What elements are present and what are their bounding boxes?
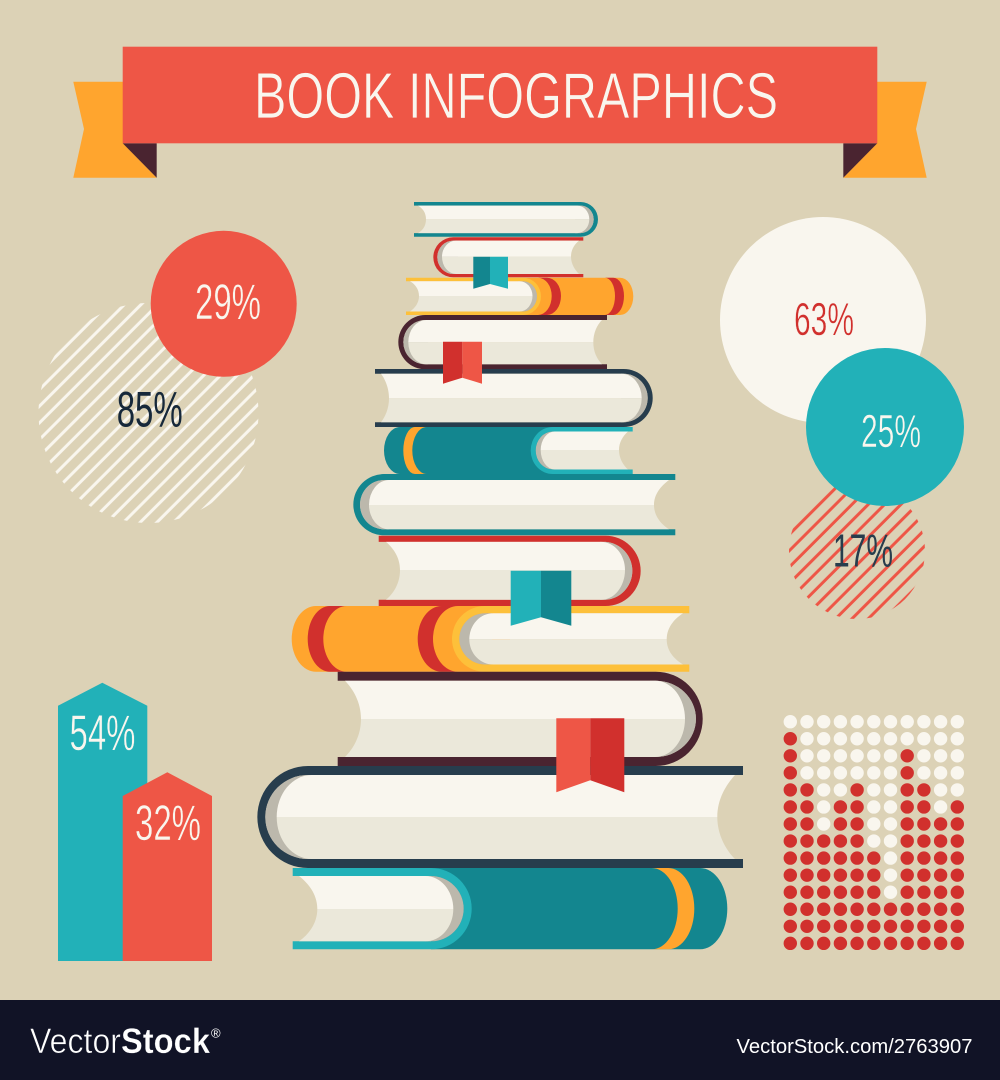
dot matrix chart <box>790 722 957 945</box>
banner right tail <box>843 82 927 178</box>
book 3: orange closed <box>406 278 633 315</box>
label 85%: 85% <box>117 382 183 438</box>
stack of books <box>257 202 743 949</box>
title text: BOOK INFOGRAPHICS <box>254 59 778 132</box>
cream circle 63% <box>720 217 926 423</box>
right circles <box>720 217 964 619</box>
footer bar <box>0 1000 1000 1080</box>
teal circle 25% <box>806 348 964 506</box>
footer url: VectorStock.com/2763907 <box>736 1036 972 1058</box>
book 10: maroon <box>338 672 703 766</box>
book 4: maroon <box>398 315 607 369</box>
label 25%: 25% <box>861 405 921 457</box>
label 54%: 54% <box>70 705 136 761</box>
label 29%: 29% <box>195 274 261 330</box>
book 11: navy large <box>257 766 743 868</box>
book 12: teal closed bottom <box>293 868 727 949</box>
book 2: red <box>433 237 583 277</box>
banner right fold <box>843 143 877 178</box>
red arrow bar <box>123 772 212 961</box>
teal arrow bar <box>58 683 147 961</box>
solid circle 29% <box>151 231 297 377</box>
label 32%: 32% <box>135 795 201 851</box>
bookmark: small teal <box>473 257 508 289</box>
footer logo: ® <box>211 1026 221 1040</box>
book 7: teal open <box>353 474 675 535</box>
label 17%: 17% <box>833 524 893 576</box>
hatched circle 85% <box>38 303 258 523</box>
book 6: teal closed <box>384 427 633 474</box>
banner left fold <box>123 143 157 178</box>
arrow bars chart <box>58 683 212 961</box>
hatched circle 17% <box>789 483 925 619</box>
label 63%: 63% <box>794 293 854 345</box>
book 1: teal top <box>414 202 598 237</box>
book 5: navy <box>375 369 653 427</box>
book 9: orange closed <box>292 606 689 672</box>
book 8: red <box>379 536 641 606</box>
bookmark: small red <box>443 342 482 384</box>
bookmark: large teal <box>511 571 571 626</box>
title banner <box>73 47 927 178</box>
left circles <box>38 231 297 523</box>
bookmark: large red <box>556 718 624 792</box>
banner left tail <box>73 82 157 178</box>
footer logo <box>30 1022 221 1061</box>
banner ribbon <box>123 47 877 143</box>
footer logo: Vector <box>30 1022 121 1061</box>
footer logo: Stock <box>121 1022 210 1061</box>
